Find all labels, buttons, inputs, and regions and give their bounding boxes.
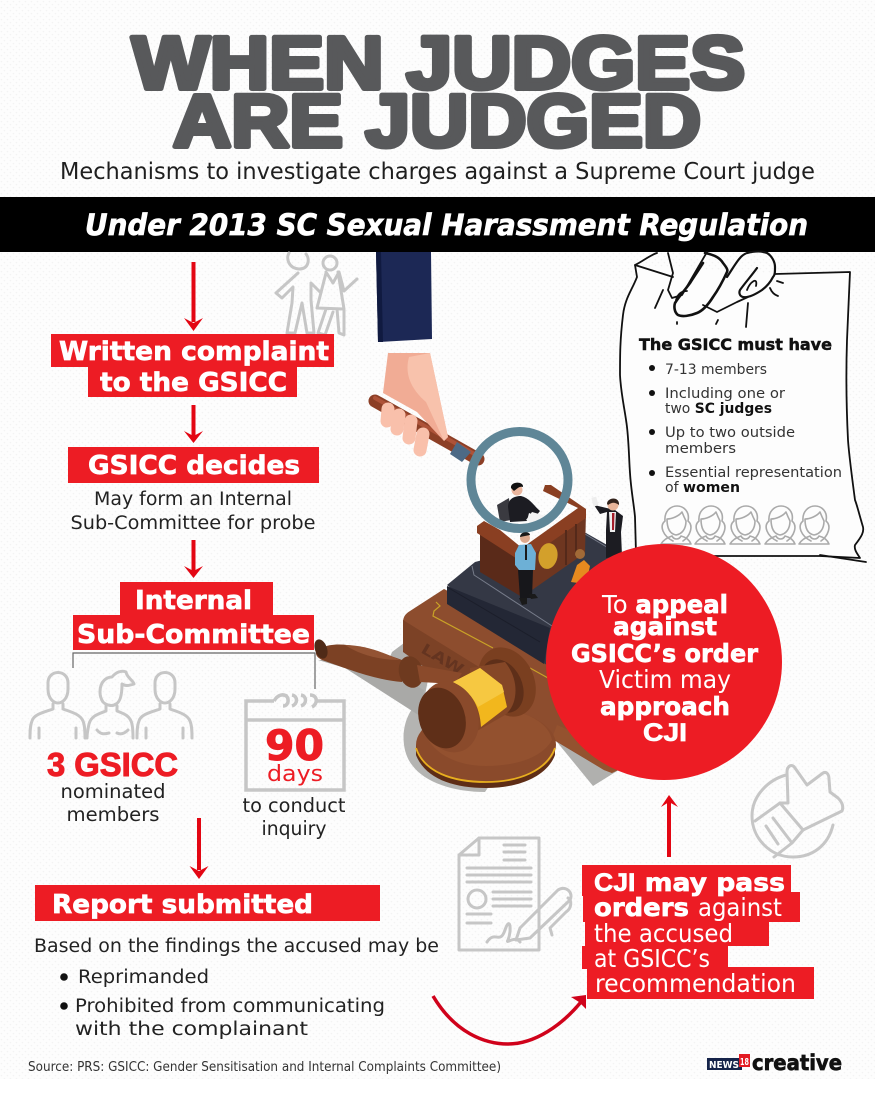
- sketch hand: [635, 252, 783, 327]
- arrow: curved to CJI box: [433, 995, 586, 1044]
- box: CJI may pass orders: against: [698, 893, 782, 922]
- dark book: [447, 533, 660, 680]
- subtitle: Mechanisms to investigate charges against a Supreme Court judge: [60, 159, 815, 185]
- requirements list: of women: [665, 480, 740, 496]
- list: outcomes: Prohibited from communicating: [75, 996, 385, 1017]
- logo: News18 creative: NEWS: [709, 1060, 739, 1071]
- book shadow: [557, 740, 622, 786]
- circle callout: appeal: GSICC’s order: [571, 639, 759, 668]
- source: Source: PRS: GSICC: Gender Sensitisation and Internal Complaints Committee): [28, 1060, 501, 1075]
- gavel far cap: [467, 638, 547, 726]
- list: outcomes: [60, 967, 385, 1040]
- header band: [0, 197, 875, 252]
- logo: News18 creative: creative: [752, 1051, 842, 1075]
- arrow: to written complaint: [184, 262, 203, 331]
- heading: The GSICC must have: [639, 335, 832, 354]
- podium: [480, 533, 522, 597]
- box: internal sub-committee: [73, 582, 314, 650]
- box: internal sub-committee: Internal: [135, 586, 252, 616]
- box: CJI may pass orders: [582, 865, 814, 999]
- list: outcomes: with the complainant: [75, 1019, 308, 1040]
- text: findings: Based on the findings the accused may be: [34, 936, 439, 957]
- circle callout: appeal: against: [613, 612, 717, 641]
- text: 3 GSICC: 3 GSICC: [47, 746, 178, 783]
- text: may form sub-committee: May form an Internal: [94, 489, 292, 510]
- box: report submitted: Report submitted: [52, 890, 313, 920]
- seated person: [571, 549, 590, 583]
- box: written complaint: [51, 334, 334, 398]
- sleeve: [376, 252, 432, 342]
- magnifier handle: [375, 401, 478, 459]
- requirements list: members: [665, 441, 736, 457]
- box: GSICC decides: GSICC decides: [88, 451, 300, 481]
- gavel handle shadow: [318, 660, 424, 716]
- requirements list: 7-13 members: [665, 362, 767, 378]
- box: GSICC decides: [68, 447, 319, 483]
- gavel near cap: [412, 674, 488, 760]
- illustration: gavel on law books: LAW: [418, 640, 467, 679]
- list: outcomes: Reprimanded: [78, 967, 209, 988]
- requirements list: Essential representation: [665, 465, 842, 481]
- icon: calendar 90 days: 90: [265, 721, 324, 770]
- circle callout: appeal: approach: [600, 692, 730, 721]
- circle callout: appeal: Victim may: [599, 665, 731, 694]
- gold band: [453, 668, 507, 727]
- hand: [383, 353, 448, 441]
- base shadow: [404, 703, 500, 792]
- box: CJI may pass orders: at GSICC’s: [594, 944, 710, 973]
- requirements list: Including one or: [665, 386, 785, 402]
- circle callout: appeal: CJI: [643, 719, 687, 747]
- gavel base: [416, 745, 555, 788]
- text: may form sub-committee: Sub-Committee for probe: [70, 513, 316, 534]
- box: CJI may pass orders: CJI may pass: [594, 868, 785, 897]
- bracket lines: [73, 653, 315, 689]
- icon: five women: [661, 506, 829, 544]
- box: CJI may pass orders: the accused: [594, 919, 733, 948]
- circle callout: appeal: [546, 544, 782, 780]
- icon: thumbs up: [752, 765, 843, 857]
- text: nominated members: members: [66, 803, 160, 826]
- requirements list: [649, 362, 842, 496]
- requirements list: Up to two outside: [665, 425, 795, 441]
- arrow: to GSICC decides: [184, 405, 203, 443]
- title: [132, 22, 745, 162]
- arrow: to report submitted: [190, 818, 208, 879]
- arrow: to internal sub-committee: [184, 540, 203, 578]
- icon: calendar 90 days: [246, 695, 344, 790]
- box: written complaint: Written complaint: [59, 337, 329, 367]
- icon: calendar 90 days: days: [267, 762, 323, 787]
- judge: [497, 483, 546, 525]
- logo: News18 creative: 18: [740, 1057, 749, 1068]
- title: WHEN JUDGES: [132, 22, 745, 104]
- text: nominated members: [60, 780, 166, 826]
- box: CJI may pass orders: recommendation: [595, 969, 796, 998]
- requirements list: two SC judges: [665, 401, 772, 417]
- arrow: to circle: [661, 795, 678, 857]
- panel: GSICC must have: [620, 252, 866, 562]
- text: to conduct inquiry: inquiry: [262, 817, 326, 840]
- title: ARE JUDGED: [173, 80, 701, 162]
- officer: [515, 532, 538, 605]
- text: may form sub-committee: [70, 489, 316, 534]
- box: report submitted: [35, 885, 380, 921]
- text: to conduct inquiry: to conduct: [242, 794, 346, 817]
- illustration: gavel on law books: [312, 252, 660, 792]
- header band: Under 2013 SC Sexual Harassment Regulation: [85, 208, 808, 242]
- icon: three members: [30, 671, 192, 738]
- box: written complaint: to the GSICC: [100, 368, 287, 398]
- box: CJI may pass orders: orders: [594, 893, 689, 922]
- lawyer: [591, 497, 623, 558]
- gavel handle: [316, 645, 402, 682]
- text: to conduct inquiry: [242, 794, 346, 840]
- text: nominated members: nominated: [60, 780, 166, 803]
- lens: [450, 442, 471, 462]
- icon: signed document: [459, 838, 571, 950]
- box: internal sub-committee: Sub-Committee: [77, 620, 310, 650]
- icon: couple: [276, 253, 357, 335]
- circle callout: appeal: To appeal: [601, 590, 728, 619]
- sketch paper outline: [620, 265, 863, 558]
- logo: News18 creative: [707, 1051, 842, 1075]
- brown book: [403, 589, 640, 773]
